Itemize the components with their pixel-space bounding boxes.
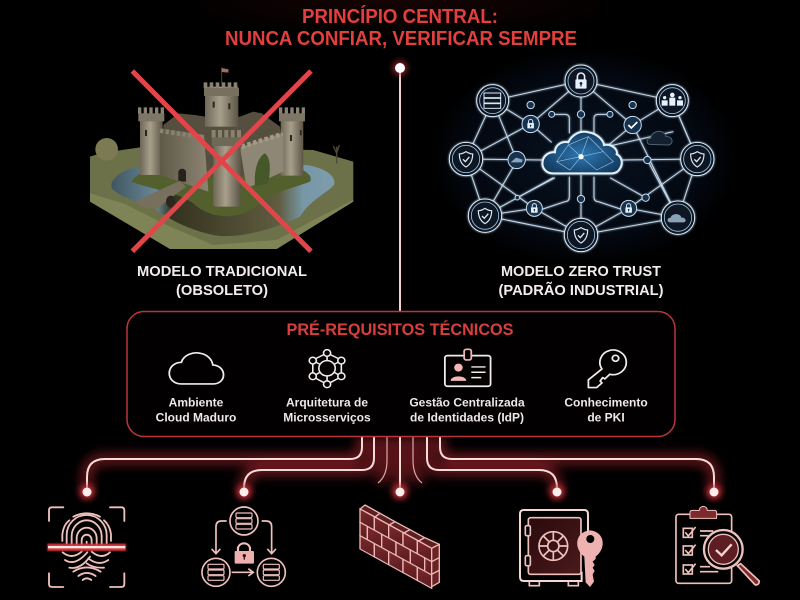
illustration: castle crossed out xyxy=(90,67,353,251)
icon: key xyxy=(588,350,626,388)
text: microservices architecture xyxy=(283,396,371,424)
text: cloud environment: Ambiente xyxy=(169,396,224,410)
label: traditional model: MODELO TRADICIONAL xyxy=(137,263,307,280)
moat xyxy=(111,165,334,236)
icon: safe with key xyxy=(520,510,603,587)
text: PKI knowledge: de PKI xyxy=(587,410,625,424)
keep tower xyxy=(204,85,239,127)
text: microservices architecture: Microsserviços xyxy=(283,410,371,424)
wall ivy xyxy=(255,153,270,187)
text: identity management: de Identidades (IdP) xyxy=(410,410,524,424)
text: PKI knowledge xyxy=(564,396,648,424)
inner keep walls xyxy=(163,112,283,177)
text: identity management xyxy=(409,396,525,424)
wall top face xyxy=(360,505,439,548)
label: zero trust model xyxy=(498,263,664,299)
text: cloud environment xyxy=(156,396,236,424)
castle gate xyxy=(178,169,186,182)
label: zero trust model: (PADRÃO INDUSTRIAL) xyxy=(498,281,664,299)
title xyxy=(225,5,577,50)
dead tree xyxy=(333,145,339,163)
island xyxy=(132,167,311,216)
text: identity management: Gestão Centralizada xyxy=(409,396,525,410)
text: cloud environment: Cloud Maduro xyxy=(156,410,236,424)
title: NUNCA CONFIAR, VERIFICAR SEMPRE xyxy=(225,27,577,50)
label: traditional model xyxy=(137,263,307,299)
wall front face xyxy=(360,509,432,588)
node icons xyxy=(459,73,704,243)
panel heading: PRÉ-REQUISITOS TÉCNICOS xyxy=(286,320,514,339)
illustration: zero trust network xyxy=(437,52,733,262)
left wall xyxy=(160,128,208,192)
left tower xyxy=(138,111,165,175)
front tower xyxy=(212,134,243,207)
flag xyxy=(222,67,229,83)
text: microservices architecture: Arquitetura de xyxy=(286,396,368,410)
icon: identity card xyxy=(445,349,491,386)
panel: technical prerequisites xyxy=(127,312,675,436)
wall end face xyxy=(432,544,439,587)
text: PKI knowledge: Conhecimento xyxy=(564,396,648,410)
icon: brick wall xyxy=(360,505,439,588)
central cloud xyxy=(542,132,622,173)
stone bridge xyxy=(135,181,186,209)
connectors to bottom icons xyxy=(80,436,721,499)
icon: audit checklist xyxy=(676,506,759,585)
icon: fingerprint scan xyxy=(47,507,126,587)
central connector line xyxy=(393,61,407,311)
right wall battlements xyxy=(242,134,283,147)
tree xyxy=(95,138,118,161)
inner rings xyxy=(452,68,711,249)
red cross xyxy=(132,71,311,251)
title: PRINCÍPIO CENTRAL: xyxy=(302,5,498,28)
left wall battlements xyxy=(160,131,204,137)
label: zero trust model: MODELO ZERO TRUST xyxy=(501,263,661,280)
icon: encrypted servers xyxy=(202,507,285,586)
right tower xyxy=(279,111,305,176)
big network nodes xyxy=(449,65,714,252)
icon: microservices xyxy=(309,350,345,388)
icon: cloud xyxy=(169,353,224,384)
network links xyxy=(466,81,697,235)
terrain patches xyxy=(90,193,353,249)
small network nodes xyxy=(508,101,651,216)
right wall xyxy=(240,133,283,188)
label: traditional model: (OBSOLETO) xyxy=(176,282,268,299)
castle terrain xyxy=(90,147,353,249)
